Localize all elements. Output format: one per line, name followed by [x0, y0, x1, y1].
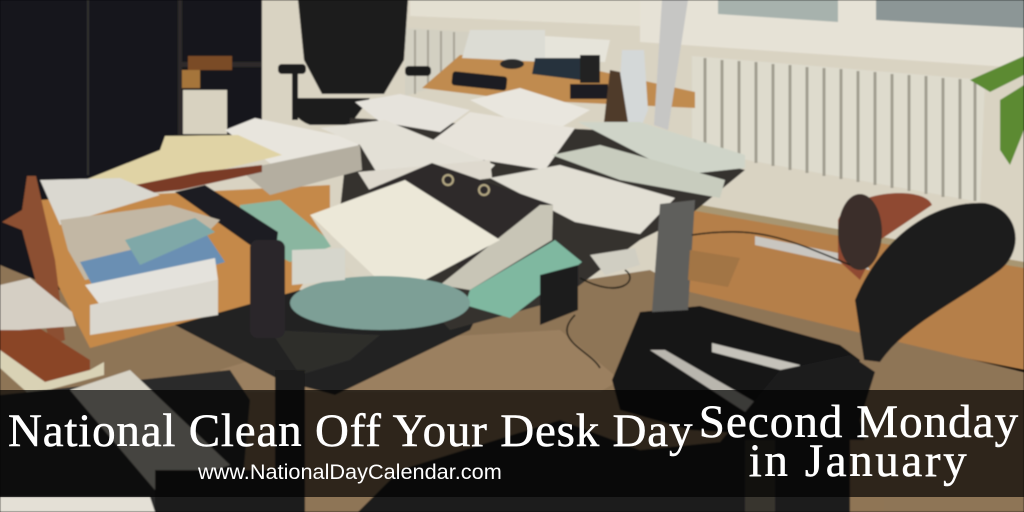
statuette: [604, 70, 628, 122]
bottom-left dark floor and papers: [0, 370, 250, 512]
desk underside shadow: [175, 290, 480, 395]
white document sheet: [310, 180, 500, 296]
teal folders: [465, 240, 582, 318]
back desk papers and keyboard: [462, 30, 545, 62]
fan: [838, 193, 932, 280]
desk front surface (wood): [38, 185, 330, 348]
front black chair: [612, 306, 860, 440]
window: [640, 0, 1024, 68]
left stack of magazines: [40, 178, 160, 225]
date text: in January: [749, 435, 969, 487]
metal pole: [654, 0, 688, 130]
open book and stand: [80, 135, 282, 192]
date text: Second Monday: [699, 396, 1019, 448]
steel desk leg: [652, 200, 695, 312]
cables and power strip: [590, 248, 640, 275]
white papers mass: [355, 94, 470, 132]
website url: www.NationalDayCalendar.com: [198, 459, 502, 484]
wooden floor: [680, 205, 1024, 370]
dark desk central mass: [340, 118, 745, 330]
radiator left: [405, 28, 470, 96]
clamp and paper stack: [292, 248, 345, 285]
water bottle: [618, 50, 648, 125]
bronze figurine and base: [2, 176, 65, 345]
glass table: [290, 276, 470, 330]
radiator right: [692, 56, 985, 202]
dark text banner: [0, 390, 1024, 497]
black cabinet: [0, 0, 262, 290]
carpet: [0, 250, 1024, 512]
skirting board: [690, 203, 1024, 268]
black ring binder: [368, 163, 553, 285]
back office chair: [278, 0, 431, 125]
title: National Clean Off Your Desk Day: [8, 405, 693, 457]
date text: [699, 396, 1019, 487]
wall: [0, 0, 1024, 300]
foreground chair backrest: [358, 355, 880, 512]
plant: [970, 56, 1024, 165]
desk back surface: [422, 55, 695, 108]
